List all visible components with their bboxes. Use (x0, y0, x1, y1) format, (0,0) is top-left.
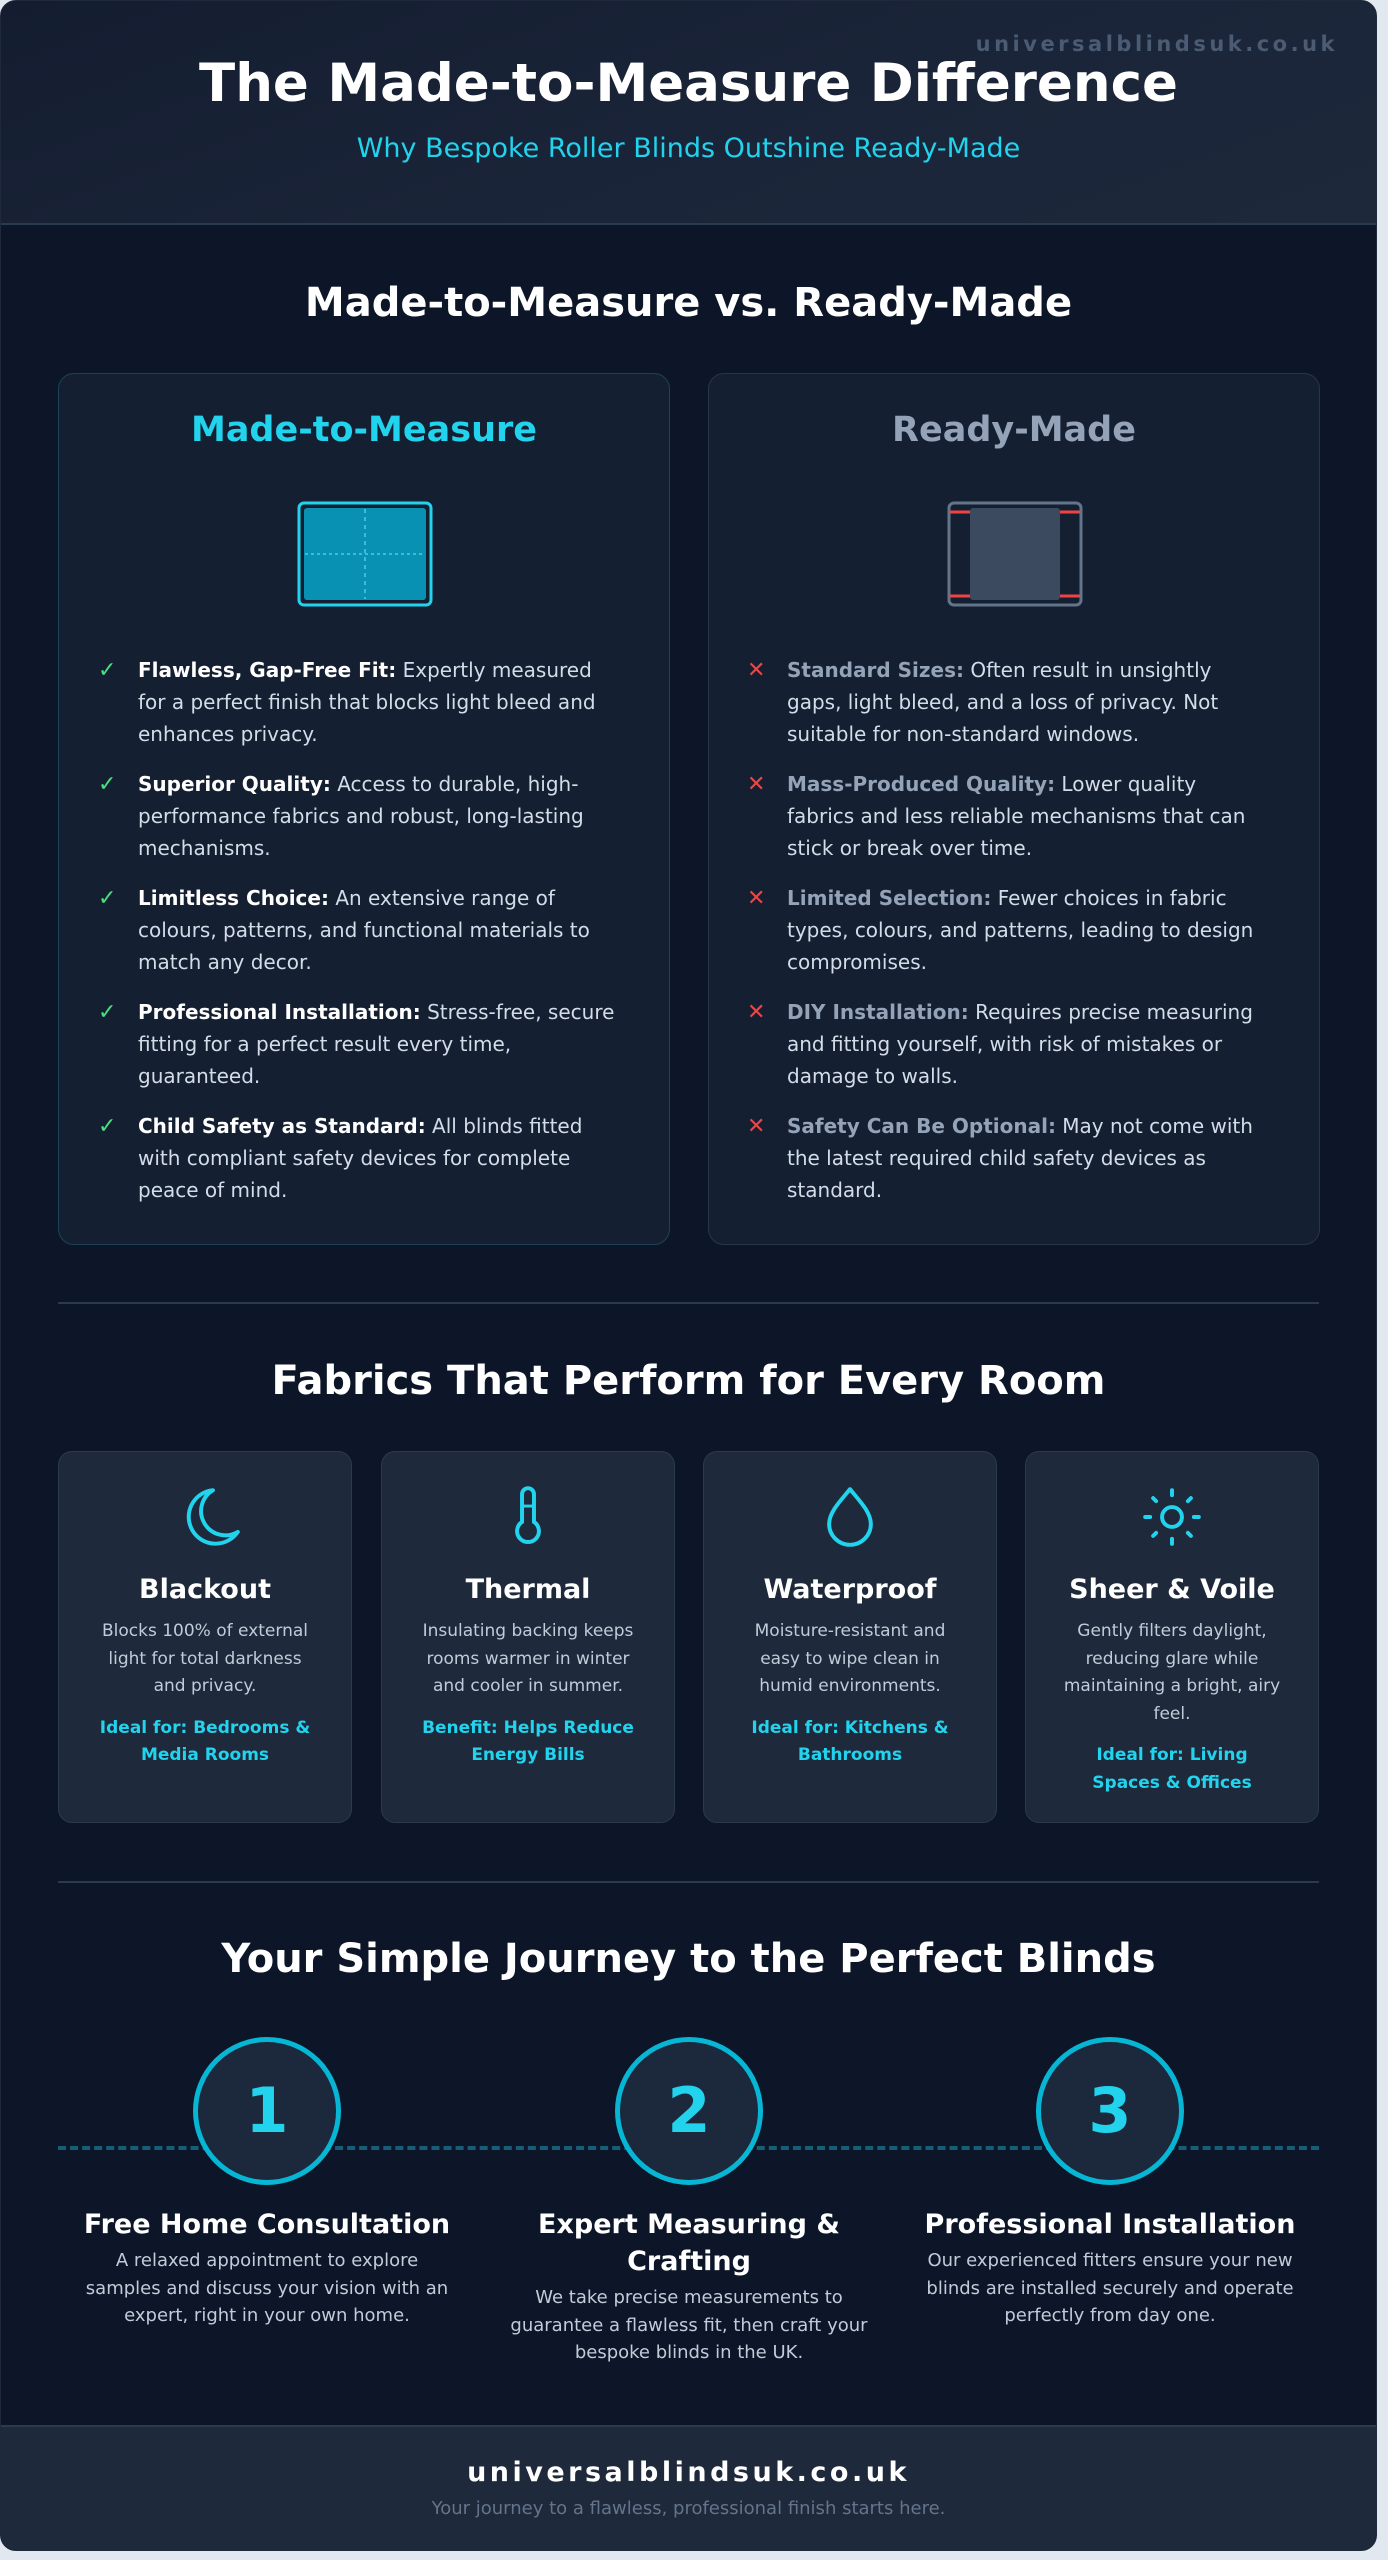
panel: made-to-measure: ✓ (98, 886, 116, 911)
title: The Made-to-Measure Difference (199, 53, 1178, 114)
drawbacks list: suitable for non-standard windows. (787, 722, 1139, 746)
icon: moon (186, 1488, 240, 1546)
step 2 (510, 2037, 868, 2363)
drawbacks list: Standard Sizes: Often result in unsightly (787, 658, 1211, 682)
panel: made-to-measure: ✓ (98, 1114, 116, 1139)
card: blackout: and privacy. (154, 1676, 256, 1696)
drawbacks list: Limited Selection: Fewer choices in fabric (787, 886, 1227, 910)
card: thermal: rooms warmer in winter (426, 1648, 630, 1668)
icon: sun (1143, 1488, 1201, 1546)
card: thermal (381, 1451, 675, 1823)
panel: ready-made: ✕ (747, 1000, 765, 1025)
step 3: 3 (1088, 2074, 1132, 2147)
card: blackout: light for total darkness (108, 1648, 302, 1668)
panel: ready-made: ✕ (747, 886, 765, 911)
step 2: 2 (667, 2074, 711, 2147)
benefits list: for a perfect finish that blocks light bleed and (138, 690, 596, 714)
card: waterproof: humid environments. (759, 1676, 941, 1696)
step 1: A relaxed appointment to explore samples and discuss your vision with an expert, right in your own home. (86, 2250, 448, 2326)
panel: made-to-measure: ✓ (98, 1000, 116, 1025)
benefits list: Limitless Choice: An extensive range of (138, 886, 555, 910)
card: waterproof: Bathrooms (798, 1745, 902, 1765)
drawbacks list: stick or break over time. (787, 836, 1032, 860)
footer tagline: Your journey to a flawless, professional finish starts here. (432, 2498, 945, 2519)
panel: made-to-measure (58, 373, 670, 1245)
step 3 (925, 2037, 1295, 2326)
step 3: Our experienced fitters ensure your new blinds are installed securely and operate perfectly from day one. (926, 2250, 1294, 2326)
card: blackout: Blackout (139, 1574, 271, 1605)
drawbacks list: Safety Can Be Optional: May not come with (787, 1114, 1253, 1138)
card: blackout: Media Rooms (141, 1745, 269, 1765)
card: sheer (1025, 1451, 1319, 1823)
card: sheer: Ideal for: Living (1096, 1745, 1248, 1765)
card: thermal: Energy Bills (471, 1745, 585, 1765)
benefits list: Professional Installation: Stress-free, secure (138, 1000, 614, 1024)
panel: made-to-measure: ✓ (98, 658, 116, 683)
benefits list (98, 658, 614, 1202)
step 1: 1 (245, 2074, 289, 2147)
drawbacks list: fabrics and less reliable mechanisms that can (787, 804, 1246, 828)
benefits list: match any decor. (138, 950, 312, 974)
card: thermal: Insulating backing keeps (423, 1621, 633, 1641)
card: waterproof: Moisture-resistant and (755, 1621, 945, 1641)
footer url: universalblindsuk.co.uk (467, 2457, 910, 2488)
step 2: Expert Measuring & Crafting (538, 2209, 840, 2277)
drawbacks list: gaps, light bleed, and a loss of privacy. Not (787, 690, 1218, 714)
subtitle: Why Bespoke Roller Blinds Outshine Ready-Made (357, 133, 1020, 164)
card: thermal: Benefit: Helps Reduce (422, 1718, 634, 1738)
panel: ready-made (708, 373, 1320, 1245)
card: thermal: and cooler in summer. (433, 1676, 623, 1696)
drawbacks list: compromises. (787, 950, 927, 974)
benefits list: enhances privacy. (138, 722, 318, 746)
card: blackout: Ideal for: Bedrooms & (100, 1718, 310, 1738)
card: thermal: Thermal (466, 1574, 590, 1605)
drawbacks list: DIY Installation: Requires precise measuring (787, 1000, 1253, 1024)
panel: ready-made: ✕ (747, 1114, 765, 1139)
drawbacks list: the latest required child safety devices as (787, 1146, 1206, 1170)
benefits list: colours, patterns, and functional materials to (138, 918, 590, 942)
drawbacks list: types, colours, and patterns, leading to design (787, 918, 1253, 942)
benefits list: Flawless, Gap-Free Fit: Expertly measured (138, 658, 592, 682)
card: waterproof: Waterproof (763, 1574, 937, 1605)
drawbacks list: Mass-Produced Quality: Lower quality (787, 772, 1196, 796)
icon: drop (827, 1487, 873, 1547)
benefits list: peace of mind. (138, 1178, 287, 1202)
panel: made-to-measure: ✓ (98, 772, 116, 797)
card: waterproof (703, 1451, 997, 1823)
heading: comparison: Made-to-Measure vs. Ready-Made (305, 280, 1072, 326)
card: blackout: Blocks 100% of external (102, 1621, 308, 1641)
drawbacks list: standard. (787, 1178, 882, 1202)
watermark: universalblindsuk.co.uk (976, 32, 1338, 56)
step 1: Free Home Consultation (84, 2209, 450, 2240)
drawbacks list: damage to walls. (787, 1064, 958, 1088)
benefits list: performance fabrics and robust, long-lasting (138, 804, 584, 828)
drawbacks list (747, 658, 1253, 1202)
step 1 (84, 2037, 450, 2326)
card: blackout (58, 1451, 352, 1823)
icon: ill-fitting blind (948, 502, 1082, 606)
drawbacks list: and fitting yourself, with risk of mistakes or (787, 1032, 1222, 1056)
panel: ready-made: ✕ (747, 658, 765, 683)
benefits list: guaranteed. (138, 1064, 260, 1088)
dashed timeline (58, 2146, 1319, 2150)
benefits list: Child Safety as Standard: All blinds fitted (138, 1114, 582, 1138)
icon: thermometer (515, 1486, 541, 1544)
panel heading: Made-to-Measure (191, 410, 537, 450)
benefits list: fitting for a perfect result every time, (138, 1032, 511, 1056)
card: sheer: feel. (1153, 1704, 1191, 1724)
benefits list: mechanisms. (138, 836, 271, 860)
footer (1, 2425, 1376, 2552)
header (1, 1, 1376, 225)
panel: ready-made: ✕ (747, 772, 765, 797)
heading: journey: Your Simple Journey to the Perfect Blinds (221, 1936, 1156, 1982)
icon: fitted blind (298, 502, 432, 606)
step 3: Professional Installation (925, 2209, 1295, 2240)
card: sheer: Spaces & Offices (1092, 1772, 1252, 1792)
panel heading: Ready-Made (892, 410, 1136, 450)
benefits list: with compliant safety devices for complete (138, 1146, 570, 1170)
benefits list: Superior Quality: Access to durable, high- (138, 772, 578, 796)
step 2: We take precise measurements to guarantee a flawless fit, then craft your bespoke blinds in the UK. (510, 2287, 868, 2363)
card: sheer: Sheer & Voile (1069, 1574, 1275, 1605)
heading: fabrics: Fabrics That Perform for Every Room (272, 1358, 1105, 1404)
card: sheer: Gently filters daylight, (1077, 1621, 1267, 1641)
card: sheer: maintaining a bright, airy (1064, 1676, 1280, 1696)
card: waterproof: Ideal for: Kitchens & (751, 1718, 949, 1738)
card: waterproof: easy to wipe clean in (760, 1648, 940, 1668)
card: sheer: reducing glare while (1086, 1648, 1258, 1668)
